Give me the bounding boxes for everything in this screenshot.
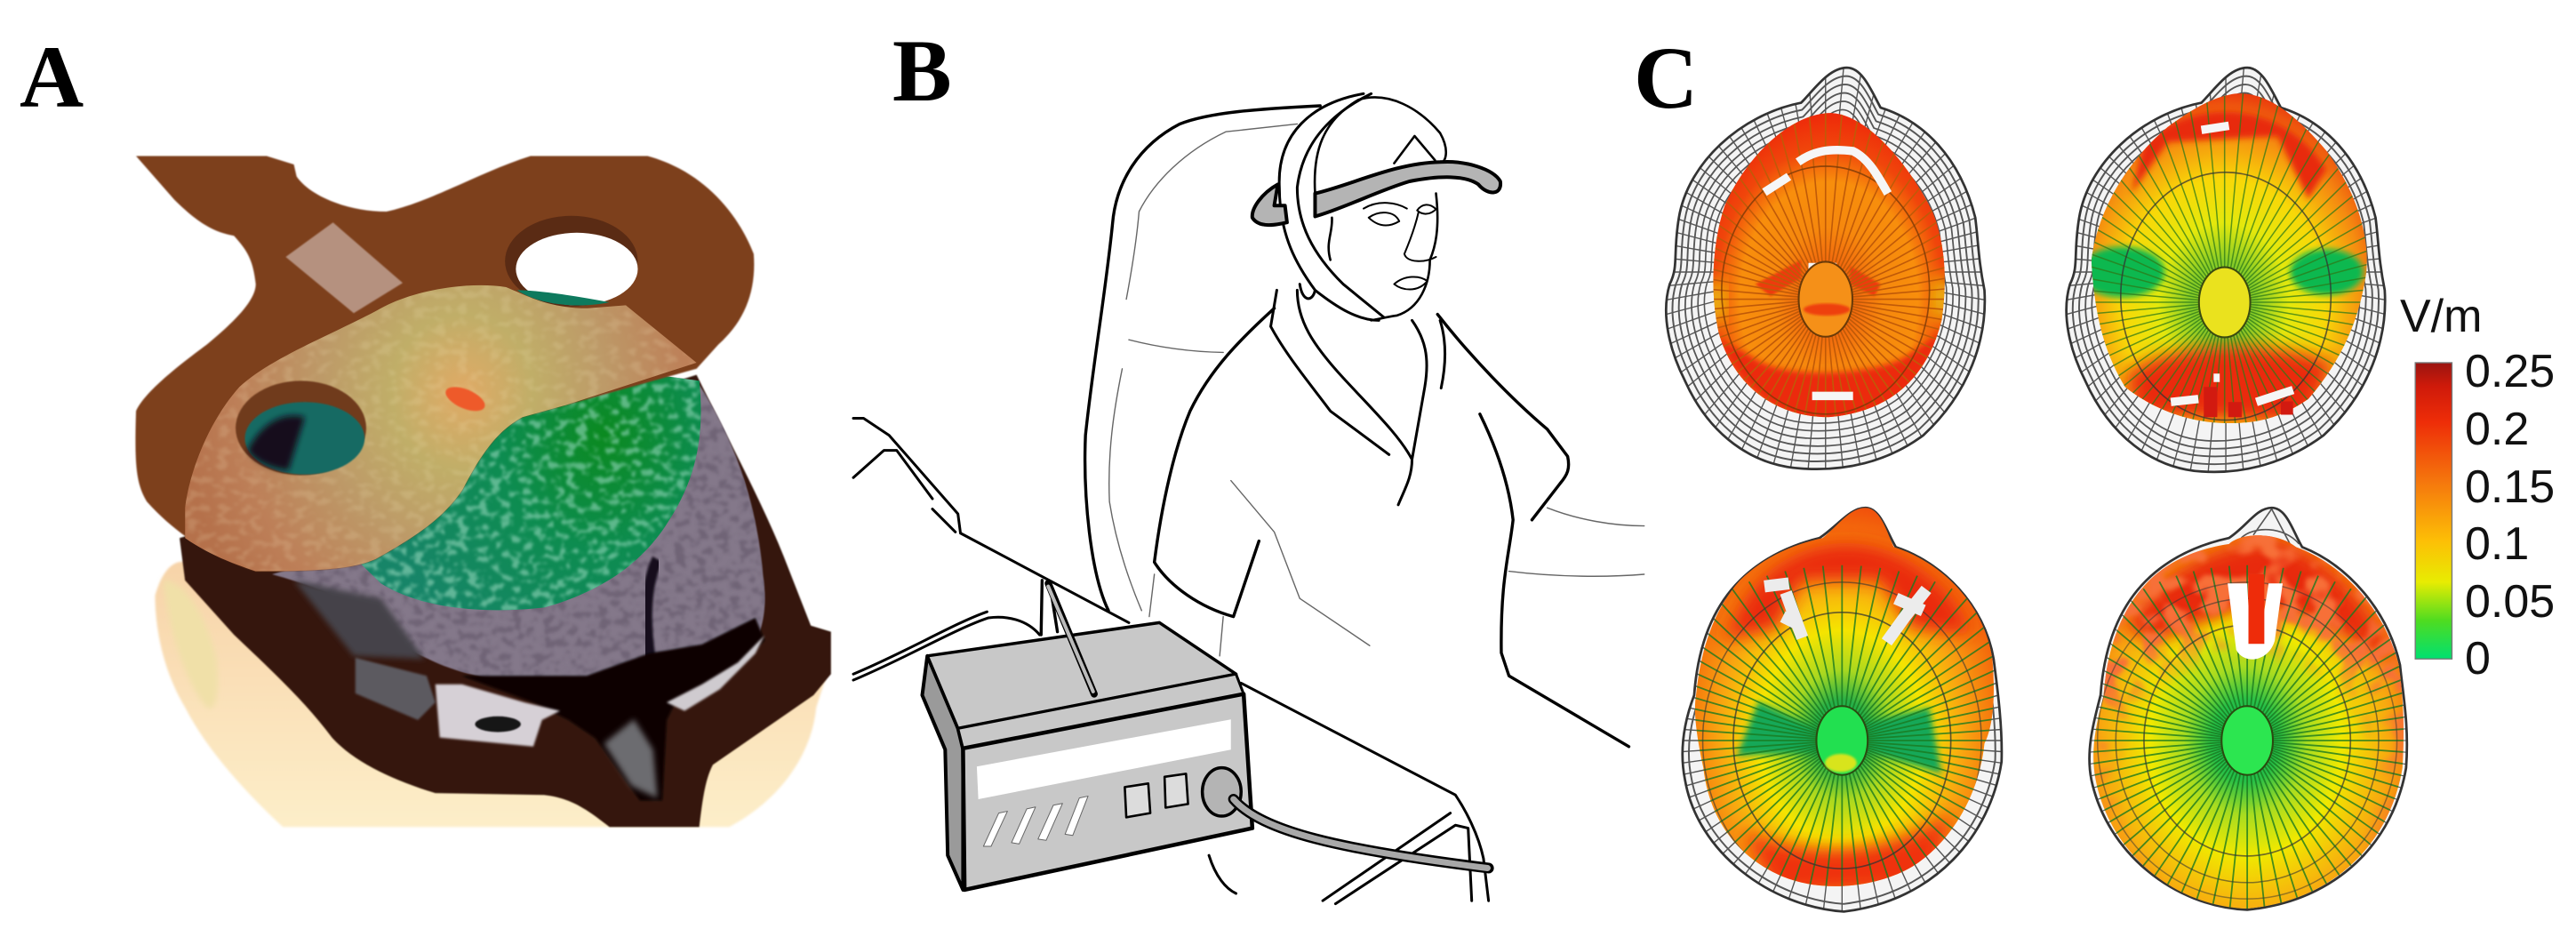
yellow right edge [1934,275,1949,324]
nose lines [2241,509,2300,544]
shirt thin creases [1220,481,1644,656]
brain visible through hole [517,290,610,305]
center ventricle [2199,268,2251,337]
white gaps [1764,150,1888,396]
brain fold texture [295,393,764,676]
colored field [2092,93,2367,423]
green fill [361,377,700,610]
colored field [1713,113,1945,417]
field blotches [1622,543,2062,916]
coil sticker label [285,222,403,313]
ring mid [2116,598,2379,883]
mesh spokes [2068,69,2384,471]
translucent coil lobe over brain [180,278,702,581]
left power wire [853,612,1040,680]
yellow base of center [1825,754,1857,772]
red top [1722,543,1972,641]
patient body [1155,290,1644,747]
device top [927,622,1236,728]
spokes [1622,565,2062,916]
spokes [1713,113,1945,418]
red bottom [2125,346,2332,423]
tick 0.05: 0.05 [2465,576,2555,628]
mesh base [2067,68,2385,472]
red band in center [1804,303,1850,316]
connector [1203,768,1241,816]
hole shadow [248,415,305,470]
hole opening [516,233,637,305]
rings [1722,166,1930,414]
nose [1404,212,1436,261]
patient head [1252,93,1500,320]
head map bottom right [2039,508,2455,916]
red side flares [1756,260,1881,296]
cable outline [1234,799,1489,868]
heading: panel label A: A [20,28,84,126]
device front band [958,674,1244,749]
chin strap [1279,93,1384,320]
antenna bar fill [1048,587,1093,692]
mesh spokes [1684,604,2001,910]
spokes [2039,565,2455,916]
sulcus [647,559,658,659]
mesh outline [1666,68,1985,469]
mesh base [2090,508,2407,909]
table and armrest lines [853,419,1489,904]
antenna bar [1048,583,1094,694]
mesh spokes [2039,565,2455,916]
heading: panel label C: C [1634,28,1698,127]
mottled noise [2088,532,2406,913]
chair back [1085,106,1320,611]
red top [2132,112,2327,199]
color scale bar [2415,363,2452,659]
mesh outline [2090,508,2407,909]
brain base [272,363,764,683]
tick 0.15: 0.15 [2465,461,2555,513]
green fan left [1737,701,1828,756]
green right lobe [2290,249,2364,295]
dark left lobe [294,581,425,659]
ring outer [2098,582,2397,899]
colored field [2093,535,2404,909]
center ventricle [1816,706,1868,775]
green fan right [1856,708,1941,773]
white bone fragment left [436,685,560,747]
coil lower hole [236,380,366,475]
chair outline [1085,106,1320,617]
ring inner [1733,613,1951,869]
ring inner [2144,625,2350,856]
heading: panel label B: B [892,21,952,120]
red top [2125,541,2394,665]
wire mesh [2068,69,2384,471]
black cavity [462,618,764,800]
device [922,581,1489,890]
colored field [1695,508,1994,886]
lower grey mass [604,719,658,798]
coil upper hole [505,216,637,307]
ring outer [1703,582,1981,899]
brain electric field green region [361,377,700,610]
shirt outline [1155,308,1628,747]
display [977,719,1231,799]
wire mesh [1684,535,2001,910]
lobe gyri noise [180,278,702,581]
chair inner seams [1109,124,1297,617]
head coil band front [1315,162,1500,216]
eyes [1364,203,1436,226]
hot spot [443,382,488,416]
coil body [135,156,754,572]
hole rim [236,380,366,475]
center ventricle [1799,261,1852,337]
mesh base [1683,508,2002,911]
panel: C, electric field head maps [1664,66,2453,913]
scale tick labels [2465,346,2555,685]
cable fill [1234,799,1487,868]
red bottom [1740,810,1954,894]
mouth [1394,276,1428,290]
tick 0.1: 0.1 [2465,518,2529,570]
ear [164,581,218,709]
panel: B, seated patient with device [853,93,1644,904]
head map top left [1664,66,1986,470]
mesh rings [2073,76,2379,464]
tick 0.2: 0.2 [2465,404,2529,455]
red bottom blotches [2211,387,2293,417]
head map top right [2065,66,2387,473]
brain grey matter [272,363,772,800]
bone cavity [475,717,521,732]
device front [963,694,1252,890]
dark sulci noise [295,393,764,676]
white bone fragment right [667,636,764,711]
white gaps [2171,125,2293,402]
white U gap [2228,583,2283,660]
rings [2121,172,2331,420]
yellow left edge [1708,278,1723,326]
wire mesh [2039,508,2455,916]
grey lower lobe [356,658,436,720]
wire mesh [1668,69,1984,468]
mesh outline [2067,68,2385,472]
head skin [155,562,830,827]
hair [1315,98,1446,194]
mesh rings [1688,702,1996,905]
green left lobe [2079,246,2164,298]
red bottom band [1718,332,1941,423]
mesh outline [1683,508,2002,911]
mesh rings [1673,76,1979,461]
collar [1271,290,1445,505]
vent slots [983,797,1088,846]
device side [922,656,963,890]
antenna stand [1041,581,1058,635]
buttons [1124,773,1188,817]
mesh base [1666,68,1985,469]
red mottling [2088,532,2406,913]
spokes and rings [1713,113,1945,418]
head map bottom left [1681,507,2004,913]
white skull gaps right [1886,589,1926,642]
field blotches [2091,93,2367,423]
head coil band rear [1252,184,1287,225]
lobe fill [180,278,702,581]
tick 0.25: 0.25 [2465,346,2555,397]
scale unit V/m: V/m [2400,291,2482,342]
dark scalp cut layer [180,375,831,827]
hole brain view [244,402,364,475]
field blotches [2039,532,2455,916]
panel: A, TMS coil over head and brain [135,156,831,827]
red center of U [2244,574,2268,644]
hole rim [505,216,637,307]
light gyri noise [361,377,700,610]
face [1329,194,1437,320]
tick 0: 0 [2465,633,2491,685]
white skull gaps left [1764,583,1803,637]
mesh spokes [1668,69,1984,468]
spokes [2092,93,2367,423]
center ventricle [2221,706,2273,775]
